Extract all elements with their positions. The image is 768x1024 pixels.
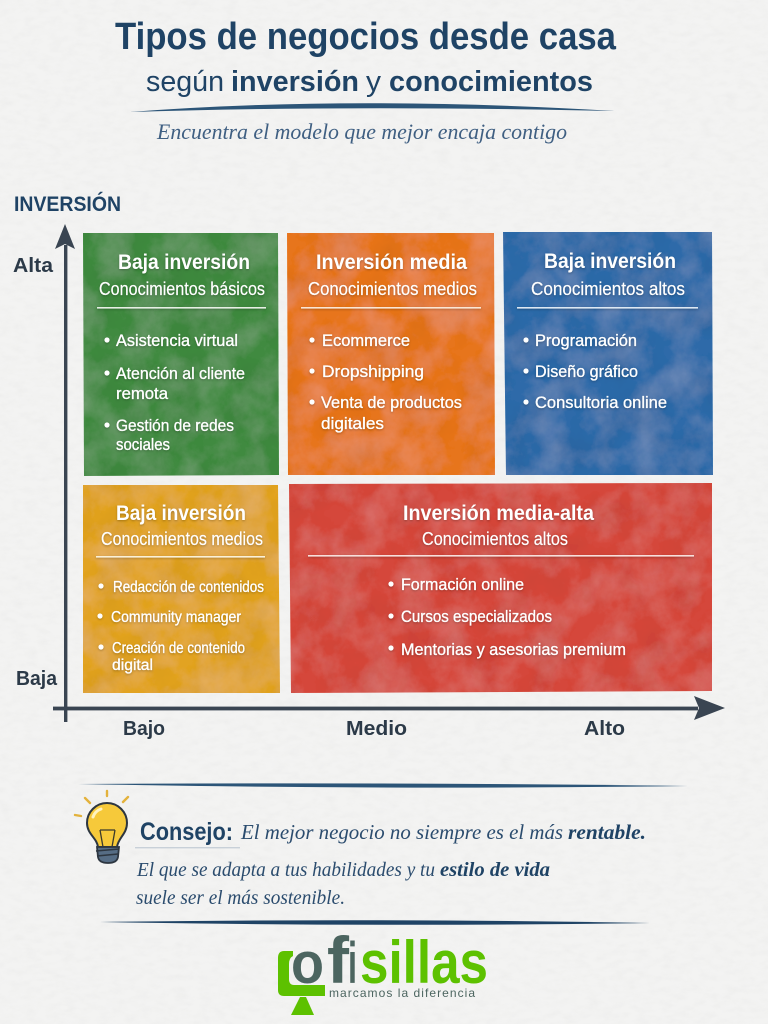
panel: green: [83, 233, 279, 476]
heading: Inversión media: [316, 251, 467, 274]
list: [523, 331, 667, 412]
panel: orange: Conocimientos medios: [308, 279, 477, 299]
list: Asistencia virtual: [116, 331, 238, 350]
list: [388, 575, 626, 659]
icon: light bulb: [75, 791, 128, 863]
tip text: suele ser el más sostenible.: [136, 887, 345, 909]
list: digital: [112, 657, 153, 674]
list: Programación: [535, 331, 637, 350]
title: Tipos de negocios desde casa: [115, 16, 617, 58]
panel: orange: [287, 233, 495, 475]
divider above logo: [100, 920, 650, 925]
subtitle: [146, 66, 593, 98]
subtitle: según: [146, 66, 224, 98]
list: Consultoria online: [535, 393, 667, 412]
logo: [278, 923, 488, 1015]
list: Diseño gráfico: [535, 362, 638, 381]
subtitle: y: [366, 66, 382, 98]
panel: yellow: Conocimientos medios: [101, 529, 263, 549]
list: [309, 331, 462, 433]
divider top of tip: [78, 783, 688, 788]
logo: sillas: [360, 929, 488, 996]
panel: yellow: [83, 485, 280, 693]
axis labels: Baja: [16, 668, 58, 690]
list: Atención al cliente: [116, 364, 245, 383]
heading: Inversión media-alta: [403, 502, 594, 525]
list: Creación de contenido: [112, 640, 245, 657]
list: Venta de productos: [321, 393, 462, 412]
list: Redacción de contenidos: [113, 579, 264, 596]
panel: red: [289, 483, 712, 693]
tagline: Encuentra el modelo que mejor encaja contigo: [156, 119, 567, 144]
logo: o: [291, 931, 324, 996]
axis labels: Bajo: [123, 718, 165, 740]
panel: blue: [503, 232, 713, 475]
tip text: Consejo:: [140, 818, 233, 846]
list: Ecommerce: [322, 331, 410, 350]
panel: red: Conocimientos altos: [422, 529, 568, 549]
list: remota: [116, 384, 169, 403]
list: [97, 579, 264, 674]
tip text: estilo de vida: [440, 859, 550, 881]
list: Formación online: [401, 575, 524, 594]
subtitle: inversión: [231, 66, 359, 98]
panel: blue: Conocimientos altos: [531, 279, 685, 299]
panel: green: Conocimientos básicos: [99, 279, 265, 299]
arrow: horizontal axis: [53, 696, 725, 720]
axis labels: [13, 255, 625, 740]
list: Dropshipping: [322, 362, 424, 381]
list: [104, 331, 245, 454]
heading: Baja inversión: [544, 250, 676, 273]
logo: i: [348, 931, 357, 996]
tip text: El mejor negocio no siempre es el más: [240, 820, 563, 844]
y axis title: INVERSIÓN: [14, 192, 121, 216]
tip text: [135, 818, 646, 909]
list: Mentorias y asesorias premium: [401, 640, 626, 659]
logo: marcamos la diferencia: [329, 986, 475, 1000]
heading: Baja inversión: [118, 251, 250, 274]
axis labels: Alto: [584, 718, 625, 740]
list: Gestión de redes: [116, 416, 234, 435]
subtitle: conocimientos: [389, 66, 593, 98]
title divider: [130, 103, 615, 112]
logo: f: [327, 923, 350, 997]
list: digitales: [321, 414, 384, 433]
arrow: vertical axis: [55, 224, 75, 722]
list: sociales: [116, 435, 170, 454]
axis labels: Medio: [346, 718, 407, 740]
heading: Baja inversión: [116, 502, 246, 525]
list: Community manager: [111, 609, 241, 626]
list: Cursos especializados: [401, 607, 552, 626]
tip text: rentable.: [568, 820, 646, 844]
axis labels: Alta: [13, 255, 54, 277]
tip text: El que se adapta a tus habilidades y tu: [136, 859, 435, 881]
